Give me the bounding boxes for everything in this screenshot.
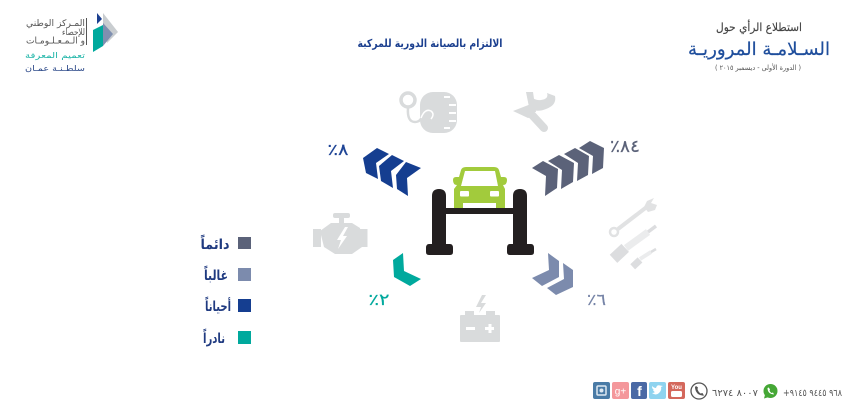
contact bar xyxy=(593,382,842,399)
wrench xyxy=(610,198,657,236)
arrow group: often 6% xyxy=(532,253,573,295)
icon: car on lift xyxy=(426,167,534,255)
legend: sometimes: أحياناً xyxy=(205,296,231,315)
logo tagline: تعميم المعرفة xyxy=(25,51,85,60)
car xyxy=(453,167,507,208)
legend: always: دائماً xyxy=(200,234,230,253)
icon: jumper clamp xyxy=(513,92,555,128)
phone number: ٨٠٠٧ ٦٢٧٤ xyxy=(712,388,758,399)
icon: tire and pressure gauge xyxy=(401,92,457,133)
arrow group: always 84% xyxy=(532,141,604,196)
logo mark xyxy=(93,13,118,52)
logo name text: المـركز الوطني xyxy=(26,19,85,29)
logo name text: للإحصاء xyxy=(62,28,85,38)
icon: facebook: f xyxy=(637,383,642,399)
survey name: السـلامـة المروريـة xyxy=(688,39,830,60)
icon: google plus: g+ xyxy=(615,386,626,398)
lift xyxy=(426,189,534,255)
chart heading: الالتزام بالصيانة الدورية للمركبة xyxy=(358,37,502,50)
value: 6%: ٦٪ xyxy=(587,290,606,309)
legend: often: غالباً xyxy=(204,265,228,284)
survey kicker: استطلاع الرأي حول xyxy=(716,19,802,35)
legend: rarely: نادراً xyxy=(203,328,225,347)
logo country: سلطـنـة عمـان xyxy=(25,64,85,73)
spark plug small xyxy=(630,249,656,269)
value: 2%: ٢٪ xyxy=(368,290,390,309)
value: 84%: ٨٤٪ xyxy=(610,137,640,157)
icon: facebook xyxy=(631,382,647,399)
icon: engine warning xyxy=(313,213,368,254)
icon: google plus xyxy=(612,382,629,399)
icon: whatsapp xyxy=(764,384,778,398)
value: 8%: ٨٪ xyxy=(328,140,349,159)
survey edition: ( الدورة الأولى - ديسمبر ٢٠١٥ ) xyxy=(715,63,801,72)
legend xyxy=(200,234,251,347)
icon: youtube: You xyxy=(671,385,682,391)
icon: youtube xyxy=(668,382,685,399)
whatsapp number: +٩٦٨ ٩٤٤٥ ٩١٤٥ xyxy=(783,388,842,399)
logo xyxy=(25,13,118,73)
survey title block xyxy=(688,19,830,72)
icon: wrench and spark plugs xyxy=(610,198,657,269)
arrow group: rarely 2% xyxy=(393,253,421,286)
arrow group: sometimes 8% xyxy=(363,148,421,196)
logo name text xyxy=(26,18,87,46)
logo name text: و الـمـعـلـومـات xyxy=(26,36,85,46)
icon: instagram xyxy=(593,382,610,399)
icon: car battery xyxy=(460,295,500,342)
icon: phone xyxy=(691,383,707,399)
icon: twitter xyxy=(649,382,666,399)
spark plug large xyxy=(610,226,656,263)
